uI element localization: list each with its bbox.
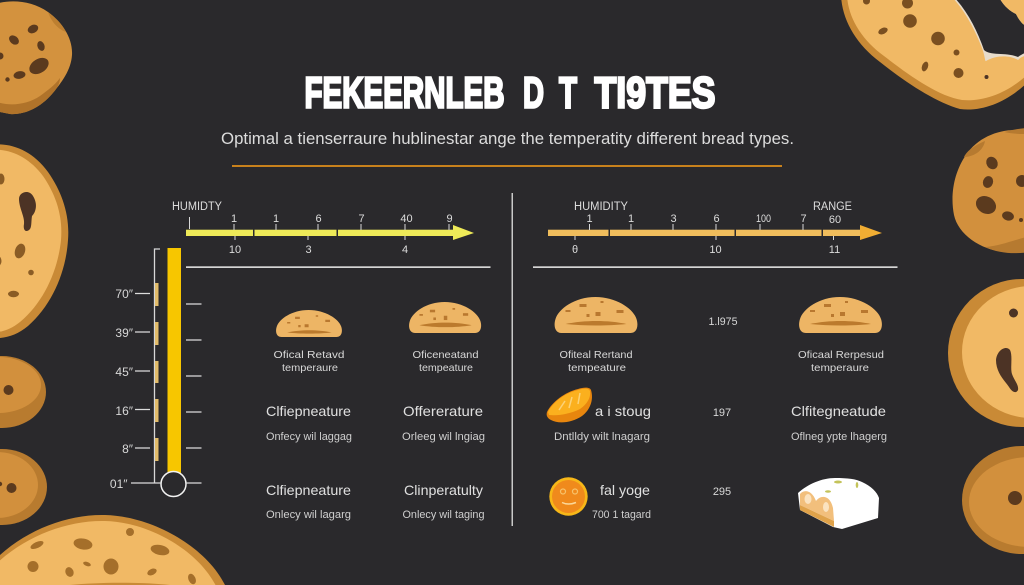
chart: right humidity range arrow: 3 [670, 213, 677, 225]
text: column 2 row 1 label: tempeature [419, 362, 473, 374]
heading rule [232, 165, 782, 167]
chart: right humidity range arrow: HUMIDITY [574, 201, 628, 213]
text: column 1 row 1 label: Ofical Retavd [274, 349, 345, 361]
text: column 2 row 2: Orleeg wil lngiag [402, 431, 485, 443]
text: column 1 row 2 [266, 403, 352, 443]
text: column 2 row 3: Clinperatulty [404, 482, 483, 498]
text: column 1 row 2: Onfecy wil laggag [266, 431, 352, 443]
chart: right humidity range arrow: 1 [586, 213, 593, 225]
chart: right humidity range arrow: θ [572, 244, 578, 256]
text: column 1 row 3: Clfiepneature [266, 482, 351, 498]
chart: thermometer: 70″ [115, 287, 134, 301]
text: column 3 row 3: 700 1 tagard [592, 509, 651, 521]
text: column 1 row 3 [266, 482, 351, 521]
icon: bread 2 [409, 302, 481, 333]
text: column 3 row 1 label: Ofiteal Rertand [560, 349, 633, 361]
text: column 4 row 2 [791, 403, 887, 443]
chart: thermometer: 39″ [115, 326, 134, 340]
chart: right humidity range arrow: 10 [709, 244, 722, 256]
icon: bread round right middle [948, 279, 1024, 427]
chart: left humidity scale arrow: 7 [358, 213, 365, 225]
chart: thermometer: 8″ [122, 442, 134, 456]
right scale underline [533, 266, 898, 268]
subtitle: Optimal a tienserraure hublinestar ange the temperatity different bread types. [221, 129, 794, 148]
text: column 4 row 2: Oflneg ypte lhagerg [791, 431, 887, 443]
icon: bread top right [841, 0, 1024, 109]
title: FEKEERNLEB [304, 68, 504, 117]
text: column 4 row 1 label [798, 349, 884, 374]
chart: thermometer: 16″ [115, 404, 134, 418]
chart: left humidity scale arrow: 10 [229, 244, 241, 256]
icon: large bread slice left [0, 144, 68, 338]
chart: left humidity scale arrow: 40 [400, 213, 413, 225]
icon: bread 3 [555, 297, 637, 333]
chart: right humidity range arrow: 100 [756, 213, 771, 225]
text: column 2 row 1 label [412, 349, 479, 374]
text: column 3 row 3 [592, 482, 651, 521]
chart: right humidity range arrow: 60 [829, 214, 841, 226]
chart: left humidity scale arrow: 9 [446, 213, 453, 225]
icon: orange face [549, 477, 588, 516]
text: column 4 row 2: Clfitegneatude [791, 403, 886, 419]
icon: small bun left lower [0, 449, 47, 525]
text: column 1 row 3: Onlecy wil lagarg [266, 509, 351, 521]
text: column 3 row 2: Dntlldy wilt lnagarg [554, 431, 650, 443]
text: column 3 row 3: fal yoge [600, 482, 650, 498]
text: column 4 row 1 label: temperaure [811, 362, 869, 374]
icon: bread loaf bottom left [0, 515, 225, 585]
text: column 2 row 3 [402, 482, 484, 521]
chart: thermometer: 01″ [110, 477, 128, 491]
text: column 2 row 3: Onlecy wil taging [402, 509, 484, 521]
chart: left humidity scale arrow: 6 [315, 213, 322, 225]
icon: bread 4 [799, 297, 882, 333]
icon: bread 1 [276, 310, 342, 337]
text: column 1 row 1 label [274, 349, 345, 374]
value: 197: 197 [713, 407, 731, 419]
chart: right humidity range arrow: 7 [800, 213, 807, 225]
chart: thermometer [110, 248, 202, 496]
chart: thermometer: 45″ [115, 365, 134, 379]
title: D [523, 68, 544, 117]
text: column 3 row 2: a i stoug [595, 403, 651, 419]
icon: bun lower right [962, 446, 1024, 554]
text: column 3 row 1 label: tempeature [568, 362, 626, 374]
chart: left humidity scale arrow: 3 [305, 244, 312, 256]
chart: left humidity scale arrow: 1 [273, 213, 279, 225]
chart: left humidity scale arrow [172, 201, 474, 256]
column divider [512, 193, 513, 526]
chart: left humidity scale arrow: HUMIDTY [172, 201, 222, 213]
value: 295: 295 [713, 486, 731, 498]
text: column 1 row 2: Clfiepneature [266, 403, 351, 419]
text: column 3 row 1 label [560, 349, 633, 374]
text: column 2 row 2 [402, 403, 485, 443]
icon: small bun left middle [0, 356, 46, 428]
text: column 4 row 1 label: Oficaal Rerpesud [798, 349, 884, 361]
left scale underline [186, 266, 490, 268]
title: TI9TES [594, 68, 716, 117]
icon: frosted cake [798, 478, 879, 529]
chart: left humidity scale arrow: 1 [231, 213, 237, 225]
chart: right humidity range arrow: 1 [628, 213, 634, 225]
chart: right humidity range arrow: 6 [713, 213, 720, 225]
icon: cookie right upper [952, 128, 1024, 253]
value: 1.l975: 1.l975 [708, 316, 738, 328]
icon: cookie top left [0, 1, 72, 114]
chart: left humidity scale arrow: 4 [402, 244, 408, 256]
chart: right humidity range arrow [548, 201, 882, 256]
text: column 3 row 2 [554, 403, 651, 443]
chart: right humidity range arrow: 11 [829, 244, 840, 256]
icon: orange slice [547, 388, 592, 422]
text: column 2 row 2: Offererature [403, 403, 483, 419]
title: T [559, 68, 577, 117]
chart: right humidity range arrow: RANGE [813, 201, 852, 213]
text: column 2 row 1 label: Oficeneatand [412, 349, 479, 361]
text: column 1 row 1 label: temperaure [282, 362, 338, 374]
